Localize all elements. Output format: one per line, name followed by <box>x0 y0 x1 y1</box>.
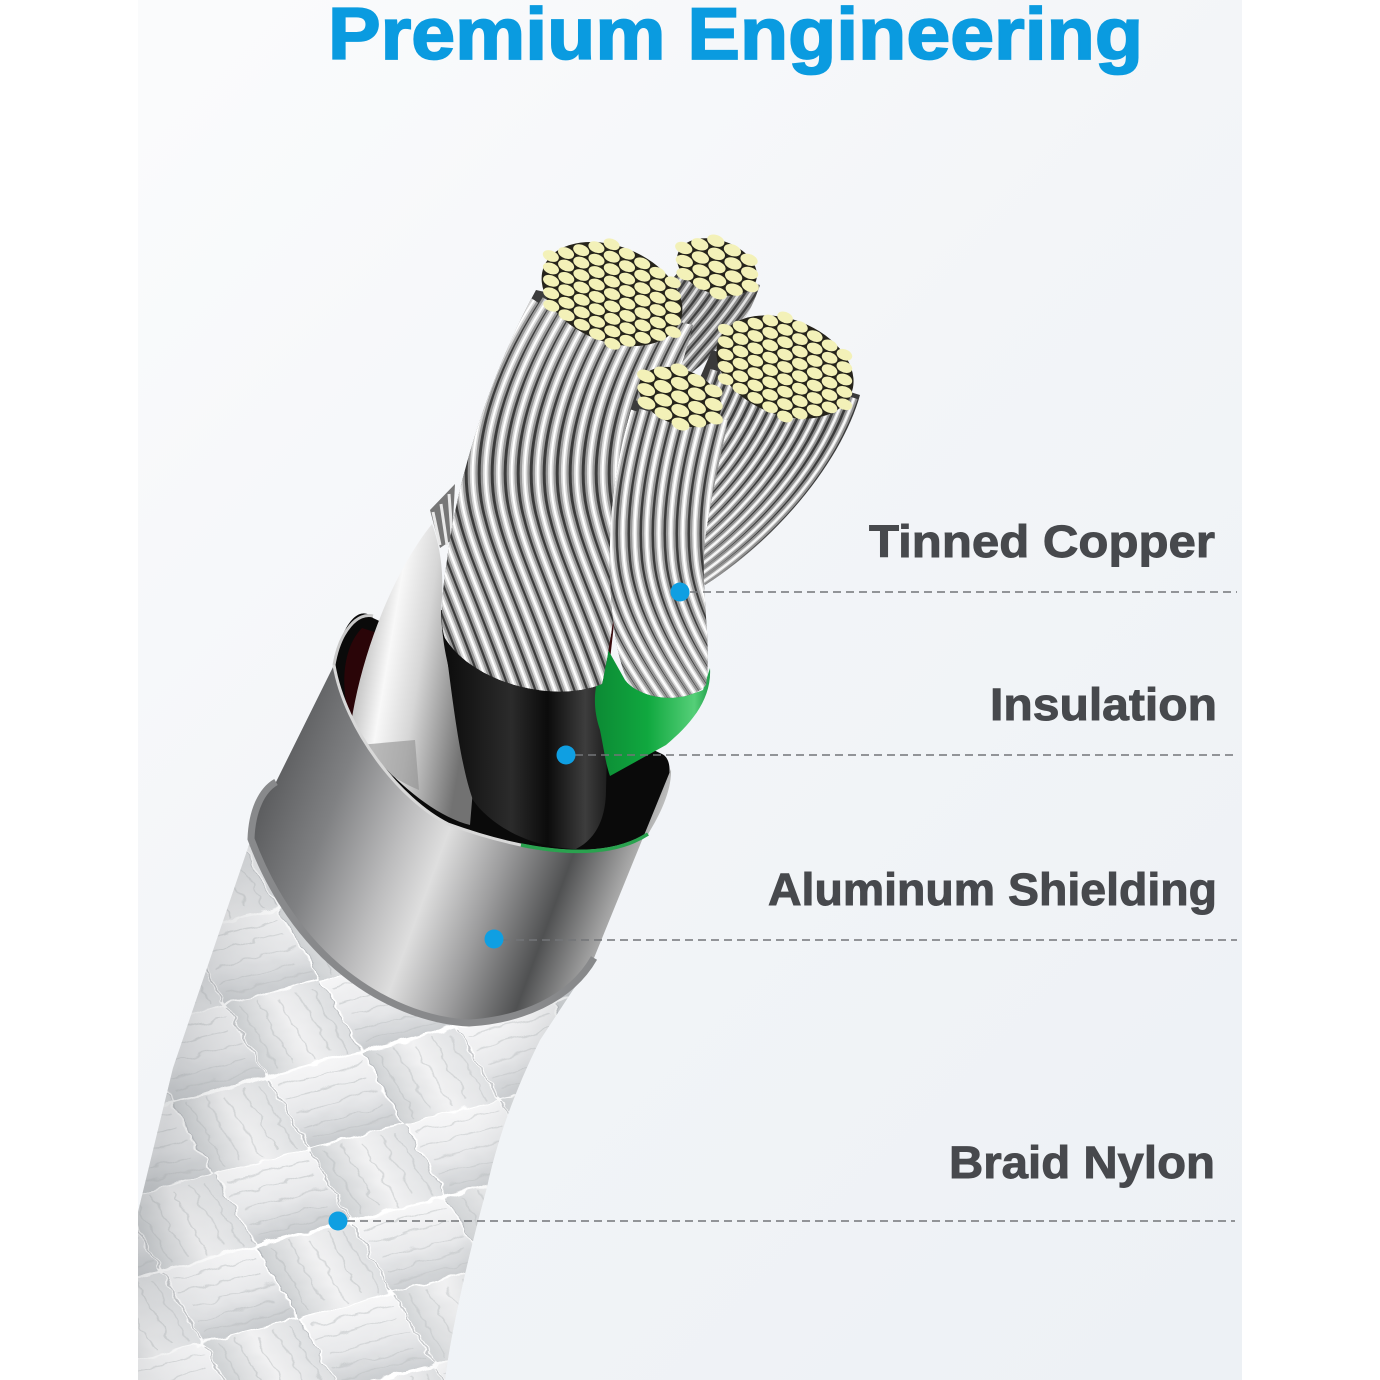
leader line <box>575 754 1235 756</box>
marker dot <box>556 746 576 764</box>
leader line <box>690 591 1237 593</box>
collar bottom lip <box>251 782 594 1023</box>
aluminum shielding collar <box>251 615 671 1023</box>
label: Tinned Copper <box>869 516 1215 567</box>
marker dot <box>670 582 690 602</box>
conductor bundle: large right <box>700 350 860 585</box>
background panel <box>138 0 1242 1380</box>
marker dot <box>484 930 504 948</box>
collar green reflection <box>520 832 649 854</box>
conductor bundle: small front <box>610 400 728 698</box>
collar front rim <box>334 665 648 851</box>
copper face: large left <box>542 238 682 350</box>
callout: insulation <box>556 679 1235 764</box>
black insulation <box>441 610 609 849</box>
callout: tinned copper <box>670 516 1237 602</box>
dark red inner core <box>344 628 374 716</box>
copper face: small front <box>637 364 723 430</box>
conductor bundle: large left <box>442 290 693 692</box>
label: Insulation <box>990 679 1217 730</box>
infographic canvas <box>138 0 1242 1380</box>
silver foil wire <box>351 524 473 825</box>
dark red core gap <box>608 620 614 655</box>
green insulation <box>595 648 710 776</box>
collar opening <box>334 613 670 851</box>
leader line <box>347 1220 1235 1222</box>
marker dot <box>328 1212 348 1230</box>
label: Braid Nylon <box>949 1137 1215 1188</box>
foil shadow wedge <box>368 740 419 790</box>
conductor bundle: back <box>674 274 760 372</box>
braided nylon sleeve <box>138 844 575 1380</box>
back conductor strand <box>430 484 455 548</box>
collar back rim <box>334 615 373 665</box>
copper face: large right <box>716 312 854 422</box>
label: Aluminum Shielding <box>768 864 1217 915</box>
cable illustration <box>100 220 880 1380</box>
leader line <box>503 939 1237 941</box>
callout: braid nylon <box>328 1137 1235 1230</box>
copper face: back <box>675 234 759 300</box>
callout: aluminum shielding <box>484 864 1237 948</box>
